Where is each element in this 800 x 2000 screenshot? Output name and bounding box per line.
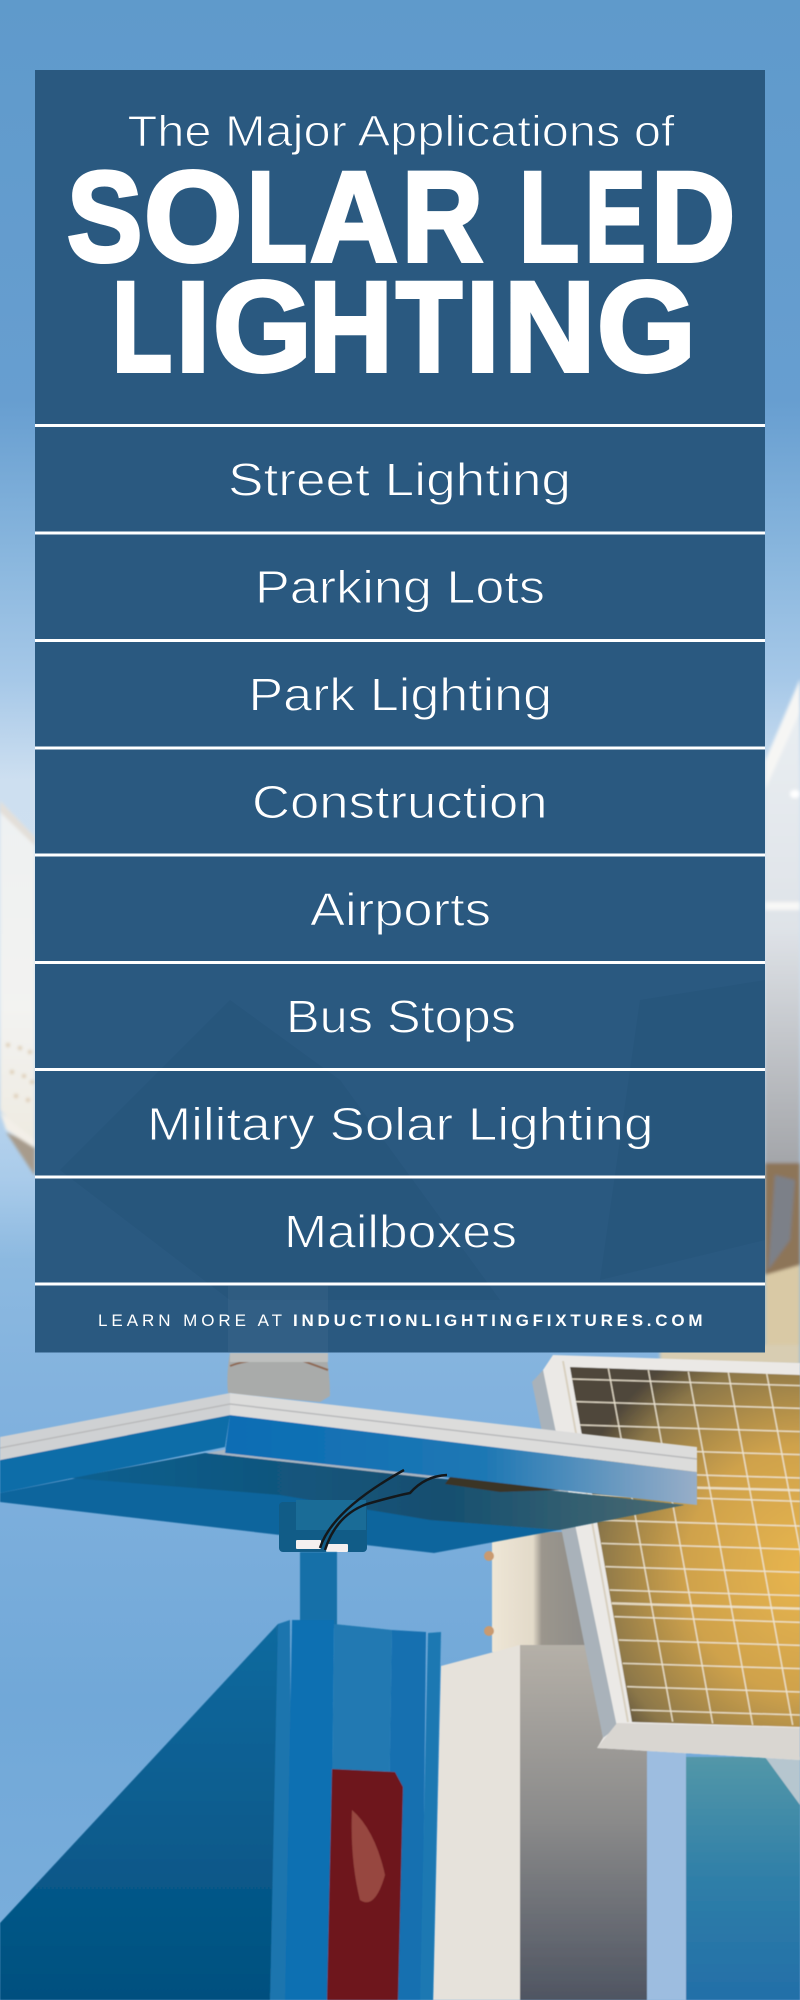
- title line: LIGHTING: G: [213, 256, 312, 399]
- title line: SOLAR LED: L: [519, 146, 579, 289]
- footer call to action: [98, 1311, 702, 1330]
- item: Military Solar Lighting: Military Solar Lighting: [147, 1098, 654, 1150]
- title line: SOLAR LED: S: [67, 146, 142, 289]
- solar panel with gold glare: [532, 1355, 800, 1760]
- title line: LIGHTING: L: [112, 256, 172, 399]
- title line: SOLAR LED: R: [402, 146, 483, 289]
- title line: LIGHTING: H: [309, 256, 393, 399]
- title line: SOLAR LED: [67, 146, 735, 289]
- red warning light: [327, 1769, 403, 2000]
- item: Street Lighting: Street Lighting: [228, 454, 571, 506]
- solar cell grid: [572, 1368, 800, 1727]
- panel: dark blue list panel: [35, 70, 765, 1352]
- background: cylinder and white enclosure: [433, 1532, 800, 2000]
- item: Mailboxes: Mailboxes: [284, 1206, 517, 1258]
- item: Airports: Airports: [310, 884, 491, 936]
- background: left street light: [0, 801, 35, 1176]
- title line: LIGHTING: T: [396, 256, 462, 399]
- blue support pole and cabinet with red light: [0, 1552, 441, 2000]
- title line: LIGHTING: I: [466, 256, 499, 399]
- footer: website: INDUCTIONLIGHTINGFIXTURES.COM: [293, 1311, 702, 1330]
- pole cap behind left solar panel: [227, 1353, 330, 1402]
- title line: LIGHTING: [112, 256, 696, 399]
- title line: LIGHTING: N: [504, 256, 595, 399]
- footer: learn more: LEARN MORE AT: [98, 1311, 282, 1330]
- item: Bus Stops: Bus Stops: [286, 990, 516, 1042]
- title line: SOLAR LED: E: [585, 146, 646, 289]
- item: Park Lighting: Park Lighting: [248, 668, 552, 720]
- title line: SOLAR LED: O: [144, 146, 242, 289]
- item: Construction: Construction: [252, 776, 548, 828]
- title line: LIGHTING: I: [176, 256, 210, 399]
- left solar panel mounted on pole: [0, 1393, 697, 1553]
- background: right street light: [660, 679, 800, 1365]
- row dividers: [35, 424, 765, 1286]
- title line: SOLAR LED: L: [247, 146, 307, 289]
- mounting bracket and wires: [279, 1470, 447, 1552]
- item: Parking Lots: Parking Lots: [255, 561, 545, 613]
- title line: SOLAR LED: A: [310, 146, 398, 289]
- list of applications: [147, 454, 654, 1258]
- title line: SOLAR LED: D: [651, 146, 735, 289]
- title line: LIGHTING: G: [597, 256, 696, 399]
- faint photo shapes through panel: [60, 980, 765, 1300]
- title line: The Major Applications of: The Major Applications of: [128, 107, 675, 156]
